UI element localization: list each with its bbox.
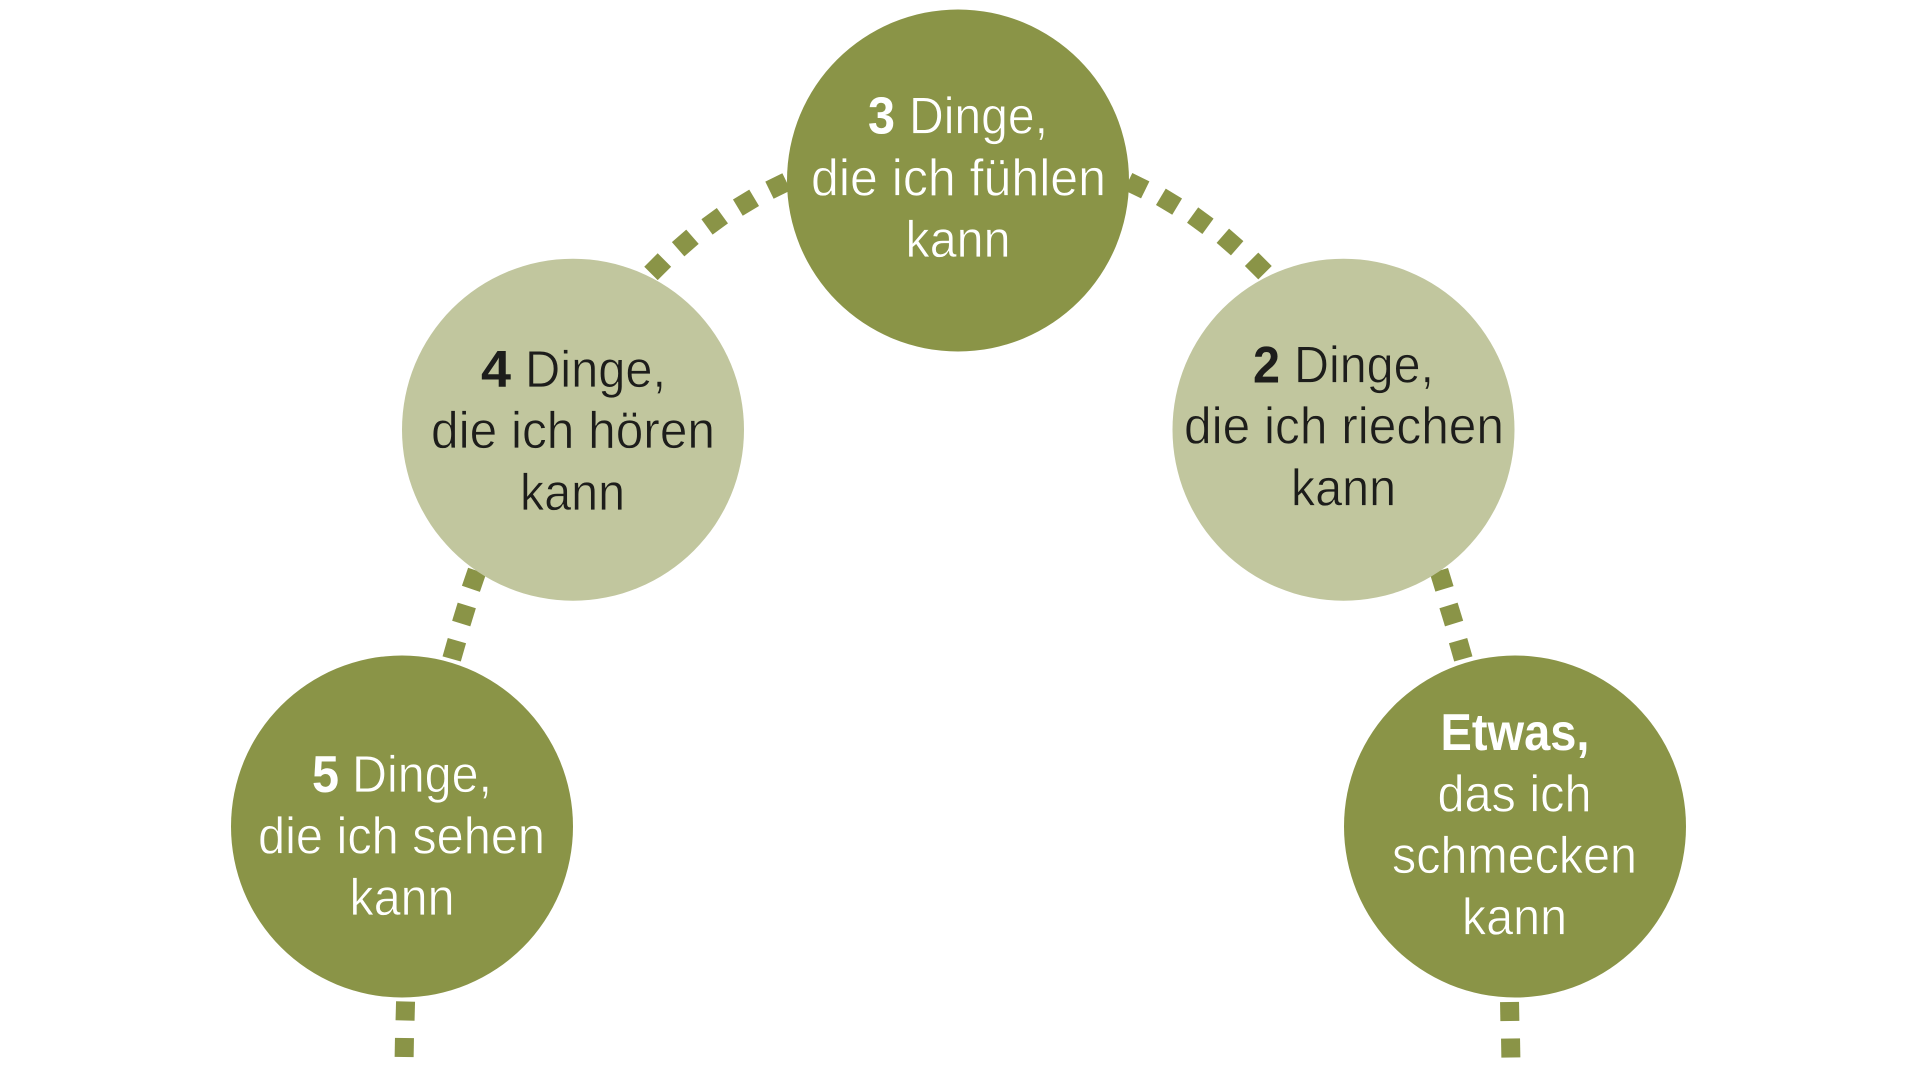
circle: Etwas schmecken: schmecken	[1392, 827, 1637, 885]
circle: Etwas schmecken	[1344, 656, 1686, 998]
circle: 2 Dinge riechen: Dinge,	[1294, 337, 1434, 395]
circle: 2 Dinge riechen: die ich riechen	[1184, 398, 1504, 456]
circle: 5 Dinge sehen	[231, 656, 573, 998]
dotted connector: 4 to 3	[644, 173, 791, 280]
dotted connector: 5 to 4	[443, 568, 486, 662]
circle: 3 Dinge fühlen	[787, 10, 1129, 352]
circle: 5 Dinge sehen: 5	[312, 746, 339, 804]
circle: 3 Dinge fühlen: die ich fühlen	[811, 149, 1106, 207]
circle: 4 Dinge hören: 4	[481, 341, 511, 399]
circle: 4 Dinge hören	[402, 259, 744, 601]
dotted connector: below 5	[395, 1001, 415, 1057]
circle: 3 Dinge fühlen: Dinge,	[909, 88, 1048, 146]
circle: 5 Dinge sehen: kann	[350, 869, 454, 927]
dotted connector: below Etwas	[1500, 1002, 1520, 1058]
circle: 4 Dinge hören: die ich hören	[431, 402, 715, 460]
circle: 4 Dinge hören: kann	[520, 464, 625, 522]
circle: Etwas schmecken: kann	[1462, 888, 1567, 946]
circle: 2 Dinge riechen: 2	[1253, 337, 1280, 395]
circle: 5 Dinge sehen: Dinge,	[352, 746, 492, 804]
circle: 3 Dinge fühlen: kann	[906, 211, 1010, 269]
circle: 3 Dinge fühlen: 3	[868, 88, 895, 146]
circle: Etwas schmecken: Etwas,	[1440, 704, 1590, 762]
circle: Etwas schmecken: das ich	[1438, 765, 1592, 823]
circle: 2 Dinge riechen: kann	[1291, 459, 1396, 517]
circle: 4 Dinge hören: Dinge,	[525, 341, 666, 399]
dotted connector: 3 to 2	[1124, 173, 1272, 279]
circle: 5 Dinge sehen: die ich sehen	[258, 808, 545, 866]
circle: 2 Dinge riechen	[1172, 259, 1514, 601]
dotted connector: 2 to Etwas	[1430, 568, 1472, 662]
